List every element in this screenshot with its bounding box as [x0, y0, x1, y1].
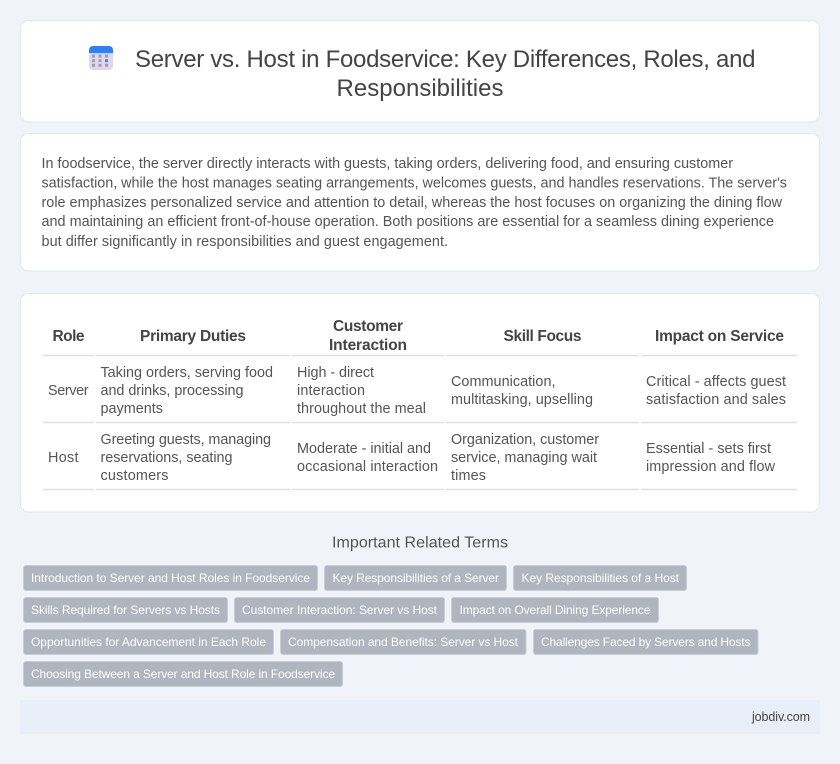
description text: and maintaining an efficient front-of-house operation. Both positions are essential for a seamless dining experience [42, 214, 774, 230]
table row: server: Server [48, 383, 89, 399]
table row: server: and drinks, processing [100, 383, 244, 399]
table row: host: reservations, seating [100, 450, 232, 466]
footer [20, 700, 820, 734]
tag: server responsibilities [324, 566, 506, 590]
table row: server: Critical - affects guest [646, 374, 786, 390]
table row: server: interaction [297, 383, 365, 399]
tag: host responsibilities: Key Responsibilities of a Host [522, 571, 680, 585]
tag: challenges: Challenges Faced by Servers and Hosts [541, 635, 750, 649]
table row: host: Essential - sets first [646, 441, 771, 457]
tag: server responsibilities: Key Responsibilities of a Server [332, 571, 499, 585]
description text: satisfaction, while the host manages seating arrangements, welcomes guests, and handles reservations. The server's [42, 176, 787, 192]
title [135, 46, 756, 102]
table row: host: times [451, 468, 486, 484]
table row: server: throughout the meal [297, 401, 426, 417]
tag: dining experience: Impact on Overall Dining Experience [460, 603, 651, 617]
tag: choosing: Choosing Between a Server and Host Role in Foodservice [31, 667, 335, 681]
tag: challenges [534, 630, 758, 654]
tag: choosing [24, 662, 342, 686]
table header row [52, 318, 784, 354]
tag: introduction: Introduction to Server and Host Roles in Foodservice [31, 571, 310, 585]
title: Server vs. Host in Foodservice: Key Differences, Roles, and [135, 46, 756, 73]
table row: server: satisfaction and sales [646, 392, 786, 408]
heading: important related terms: Important Related Terms [332, 534, 508, 552]
table row: host: Moderate - initial and [297, 441, 431, 457]
description text: In foodservice, the server directly interacts with guests, taking orders, delivering food, and ensuring customer [42, 156, 733, 172]
tag: host responsibilities [514, 566, 686, 590]
table row: host: impression and flow [646, 459, 776, 475]
table row: server: High - direct [297, 365, 374, 381]
table row: host: customers [100, 468, 168, 484]
table row: host: Greeting guests, managing [100, 432, 271, 448]
table row: host: Host [48, 450, 78, 466]
related term tags [24, 566, 758, 686]
table row: server: payments [100, 401, 163, 417]
tag: skills: Skills Required for Servers vs Hosts [31, 603, 220, 617]
table row: server: Taking orders, serving food [100, 365, 273, 381]
table row: server: Communication, [451, 374, 556, 390]
tag: compensation: Compensation and Benefits: Server vs Host [288, 635, 519, 649]
table row: server [48, 365, 786, 417]
table row: host: service, managing wait [451, 450, 597, 466]
table row: host: occasional interaction [297, 459, 438, 475]
table header row: Primary Duties [140, 328, 246, 345]
table header row: Skill Focus [504, 328, 582, 345]
title: Responsibilities [336, 75, 504, 102]
description text [42, 156, 787, 250]
footer site name: jobdiv.com [751, 710, 810, 724]
icon: calendar [89, 46, 113, 70]
tag: dining experience [452, 598, 658, 622]
panel: header [20, 20, 820, 122]
table row: host: Organization, customer [451, 432, 599, 448]
tag: advancement: Opportunities for Advancement in Each Role [31, 635, 266, 649]
description text: but differ significantly in responsibilities and guest engagement. [42, 234, 448, 250]
table header row: Role [52, 328, 85, 345]
tag: customer interaction: Customer Interaction: Server vs Host [242, 603, 438, 617]
panel: description [20, 134, 820, 271]
tag: advancement [24, 630, 274, 654]
table header row: Impact on Service [655, 328, 784, 345]
table header row: Interaction [329, 337, 407, 354]
tag: customer interaction [234, 598, 444, 622]
tag: introduction [24, 566, 318, 590]
panel: comparison table [20, 294, 820, 512]
table header row: Customer [333, 318, 403, 335]
table row: server: multitasking, upselling [451, 392, 593, 408]
tag: compensation [280, 630, 526, 654]
description text: role emphasizes personalized service and attention to detail, whereas the host focuses on organizing the dining flow [42, 195, 783, 211]
table row: host [48, 432, 776, 484]
tag: skills [24, 598, 228, 622]
